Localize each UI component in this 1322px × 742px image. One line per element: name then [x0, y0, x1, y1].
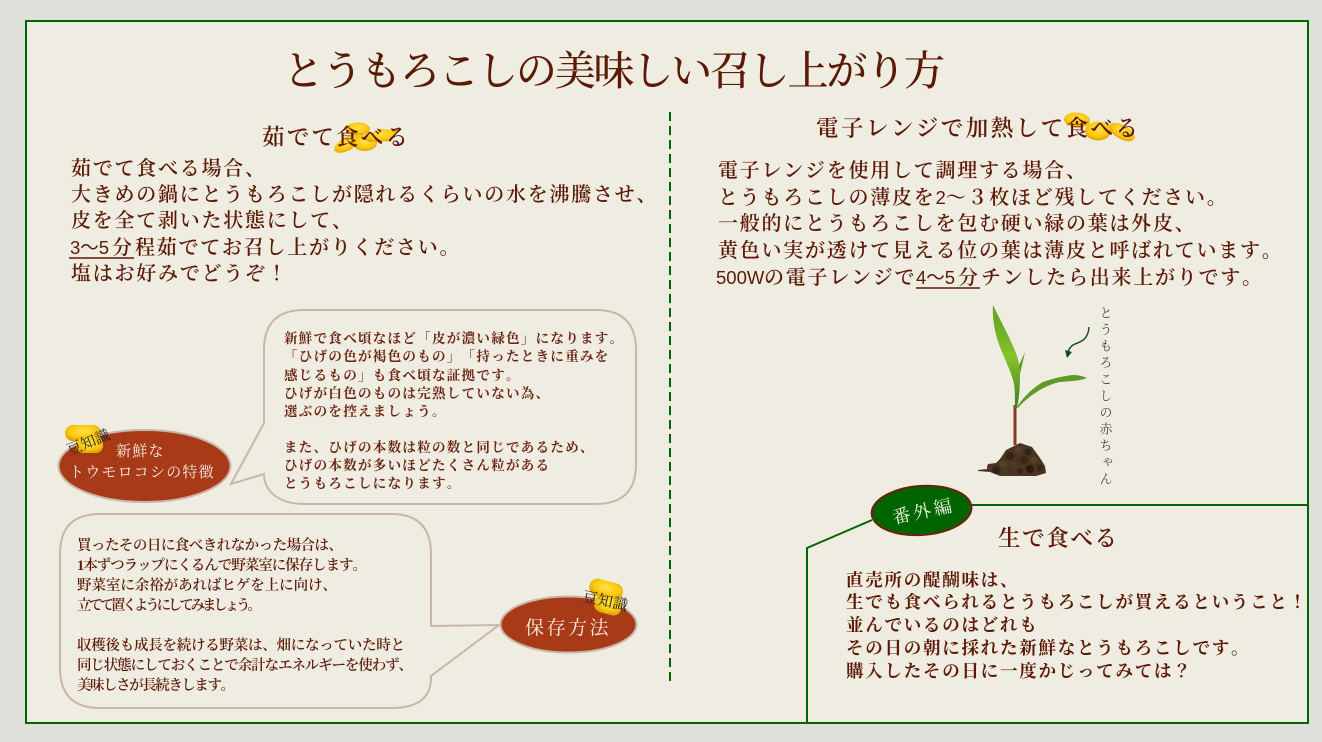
text: raw description: 購入したその日に一度かじってみては？: [846, 661, 1192, 681]
badge: fresh corn: [58, 425, 230, 502]
text: microwave instructions: 電子レンジを使用して調理する場合、: [718, 159, 1088, 182]
text: microwave instructions: の電子レンジで: [764, 266, 916, 289]
text: storage tips: 1本ずつラップにくるんで野菜室に保存します。: [77, 556, 367, 574]
text: boil instructions: 3〜5: [70, 237, 109, 258]
text: boil instructions: [69, 156, 658, 285]
icon: corn with trivia label: 豆知識: [64, 426, 113, 459]
text: microwave instructions: [716, 159, 1284, 289]
text: storage tips: 美味しさが長続きします。: [77, 676, 235, 694]
badge: fresh corn: トウモロコシの特徴: [69, 464, 215, 481]
text: storage tips: 同じ状態にしておくことで余計なエネルギーを使わず、: [77, 656, 413, 674]
text: boil instructions: 程茹でてお召し上がりください。: [135, 235, 461, 259]
text: raw description: 直売所の醍醐味は、: [846, 570, 1019, 590]
badge: storage method: 保存方法: [525, 617, 611, 639]
text: storage tips: 収穫後も成長を続ける野菜は、畑になっていた時と: [77, 636, 405, 654]
text: microwave instructions: 分: [958, 266, 980, 289]
text: raw description: 並んでいるのはどれも: [846, 615, 1038, 635]
soil mound: [978, 443, 1046, 476]
text: fresh corn tips: また、ひげの本数は粒の数と同じであるため、: [284, 439, 595, 455]
text: fresh corn tips: とうもろこしになります。: [284, 476, 462, 491]
text: boil instructions: 分: [112, 236, 134, 259]
illustration: corn seedling: [978, 305, 1087, 476]
text: fresh corn tips: 選ぶのを控えましょう。: [284, 403, 447, 419]
text: fresh corn tips: 新鮮で食べ頃なほど「皮が濃い緑色」になります。: [284, 330, 624, 346]
icon: corn with trivia label: 豆知識: [581, 587, 630, 615]
callout: storage: [60, 514, 499, 708]
text: boil instructions: 皮を全て剥いた状態にして、: [71, 209, 354, 232]
text: boil instructions: 大きめの鍋にとうもろこしが隠れるくらいの水を沸騰させ、: [71, 183, 658, 206]
icon: corn kernels: [332, 122, 399, 156]
text: microwave instructions: 500W: [716, 267, 765, 288]
text: boil instructions: 茹でて食べる場合、: [71, 156, 267, 180]
text: microwave instructions: 黄色い実が透けて見える位の葉は薄皮と呼ばれています。: [718, 238, 1284, 262]
badge: bonus section: [870, 483, 973, 538]
badge: storage method: [500, 577, 636, 652]
speech bubble: [60, 514, 499, 708]
heading: raw: 生で食べる: [998, 526, 1117, 551]
callout: fresh corn characteristics: [231, 310, 636, 504]
text: microwave instructions: 一般的にとうもろこしを包む硬い緑の葉は外皮、: [718, 212, 1196, 235]
text: raw description: [846, 570, 1308, 681]
center dashed divider: [669, 112, 671, 684]
panel: boil: [69, 122, 658, 285]
text: storage tips: [77, 537, 413, 694]
text: fresh corn tips: 感じるもの」も食べ頃な証拠です。: [284, 367, 521, 383]
panel: microwave: [716, 111, 1284, 289]
text: storage tips: 野菜室に余裕があればヒゲを上に向け、: [77, 576, 337, 594]
text: storage tips: 立てて置くようにしてみましょう。: [77, 597, 262, 614]
text: fresh corn tips: 「ひげの色が褐色のもの」「持ったときに重みを: [284, 348, 610, 364]
panel: eat raw: [807, 483, 1308, 723]
badge: fresh corn: 新鮮な: [116, 442, 165, 460]
title: とうもろこしの美味しい召し上がり方: [283, 48, 945, 94]
badge: bonus section: 番外編: [891, 496, 954, 528]
speech bubble: [231, 310, 636, 504]
heading: microwave: 電子レンジで加熱して食べる: [816, 116, 1138, 141]
icon: corn kernels: [1063, 111, 1138, 145]
text: fresh corn tips: [284, 330, 624, 491]
text: microwave instructions: とうもろこしの薄皮を2〜３枚ほど残してください。: [718, 186, 1229, 209]
text: boil instructions: 塩はお好みでどうぞ！: [71, 262, 288, 285]
text: microwave instructions: チンしたら出来上がりです。: [981, 266, 1264, 289]
arrow: points to seedling: [1065, 327, 1089, 358]
caption: baby corn: とうもろこしの赤ちゃん: [1098, 306, 1112, 489]
text: microwave instructions: 4〜5: [916, 267, 955, 288]
text: fresh corn tips: ひげが白色のものは完熟していない為、: [284, 385, 550, 401]
text: raw description: 生でも食べられるとうもろこしが買えるということ！: [846, 592, 1308, 612]
text: fresh corn tips: ひげの本数が多いほどたくさん粒がある: [284, 457, 550, 473]
text: raw description: その日の朝に採れた新鮮なとうもろこしです。: [846, 638, 1250, 658]
panel border lines: [807, 505, 1308, 723]
text: storage tips: 買ったその日に食べきれなかった場合は、: [77, 537, 343, 554]
heading: boil: 茹でて食べる: [262, 125, 408, 150]
